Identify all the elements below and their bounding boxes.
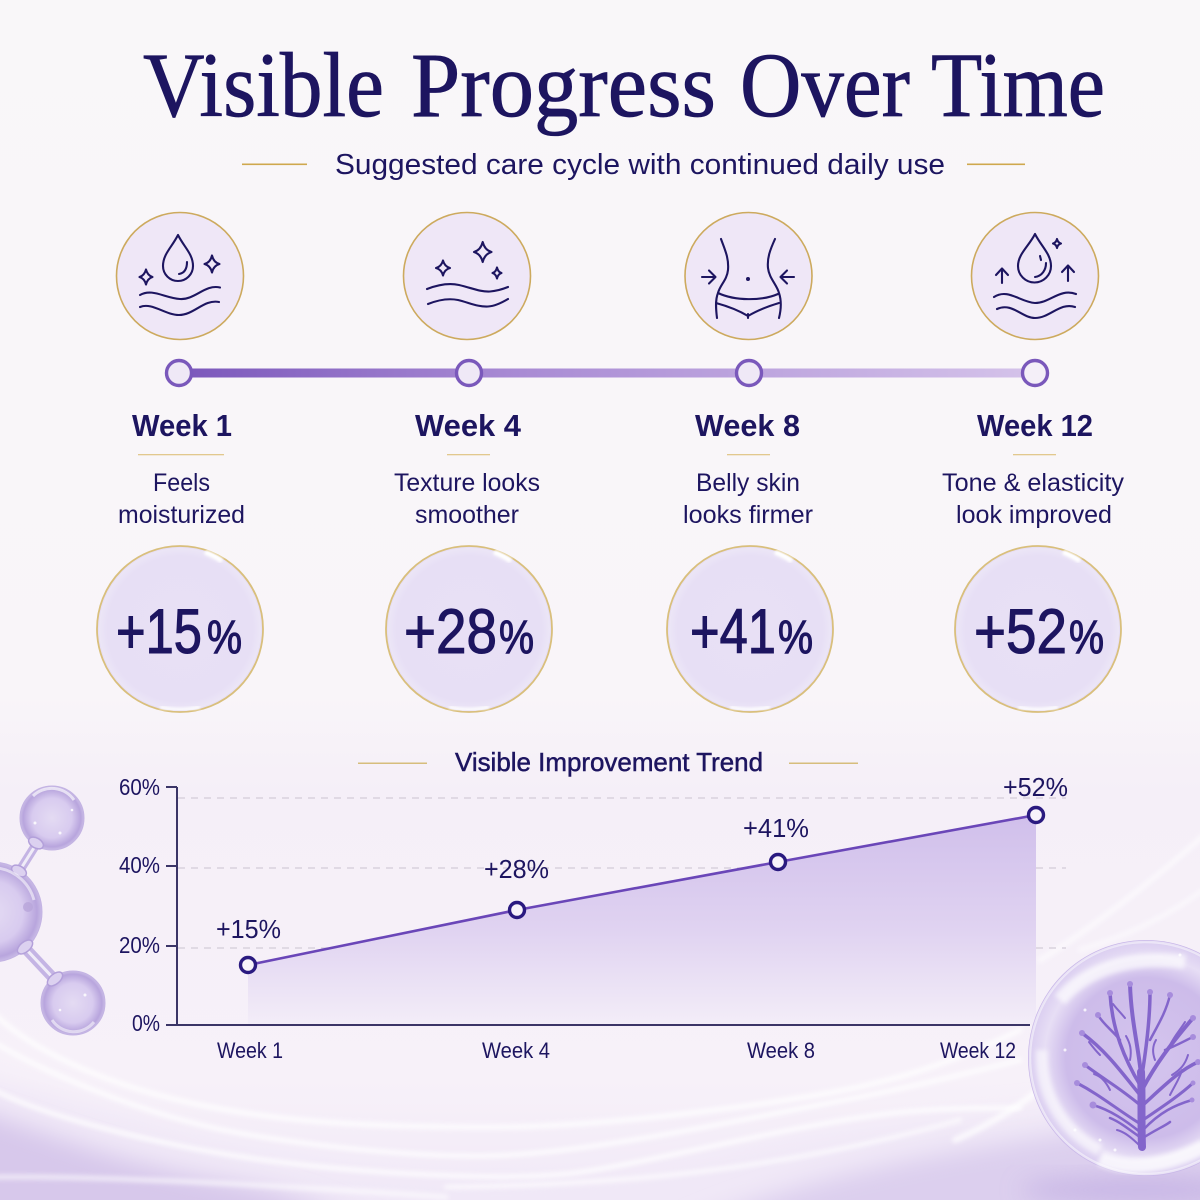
title: Time: [931, 34, 1105, 136]
step: week 4: smoother: [415, 501, 519, 529]
molecule illustration: [0, 786, 105, 1035]
glass sphere with lavender tree: [1020, 940, 1200, 1200]
stat badge: +15%: %: [207, 610, 242, 663]
step: week 4: Week 4: [415, 408, 522, 443]
step: week 12: Tone & elasticity: [942, 469, 1125, 497]
line chart: visible improvement trend: 0%: [132, 1010, 160, 1036]
title: [143, 34, 1105, 136]
icon: week 12 drop with arrows: [972, 212, 1098, 340]
stat badge: +52%: [955, 546, 1121, 712]
stat badge: +28%: +28: [404, 597, 497, 667]
title: Progress: [411, 34, 716, 136]
step: week 12: look improved: [956, 501, 1112, 529]
step: week 4: Texture looks: [394, 469, 540, 497]
icon: week 1 moisture drop: [116, 212, 244, 340]
line chart: visible improvement trend: +15%: [216, 914, 281, 944]
stat badge: +41%: %: [778, 610, 813, 663]
step: week 1: moisturized: [118, 501, 245, 529]
step: week 12: Week 12: [977, 408, 1093, 443]
step: week 1: Feels: [153, 469, 210, 497]
stat badge: +15%: [97, 546, 263, 712]
line chart: visible improvement trend: 20%: [119, 932, 160, 958]
line chart: visible improvement trend: Week 8: [747, 1038, 815, 1063]
line chart: visible improvement trend: Week 4: [482, 1038, 550, 1063]
title: Visible: [143, 34, 384, 136]
stat badge: +52%: +52: [974, 597, 1067, 667]
stat badge: +28%: %: [499, 610, 534, 663]
line chart: visible improvement trend: Week 12: [940, 1038, 1016, 1063]
line chart: visible improvement trend: +41%: [743, 813, 809, 843]
subtitle with gold rules: Suggested care cycle with continued daily use: [335, 149, 945, 181]
step: week 8: Week 8: [695, 408, 800, 443]
line chart: visible improvement trend: +52%: [1003, 772, 1068, 802]
icon: week 8 firmer belly: [685, 212, 812, 340]
step: week 8: looks firmer: [683, 501, 813, 529]
background with silk waves: [0, 1078, 1200, 1200]
chart heading: Visible Improvement Trend: [455, 747, 763, 777]
title: Over: [740, 34, 910, 136]
stat badge: +41%: +41: [690, 597, 776, 667]
step: week 8: [683, 408, 813, 529]
stat badge: +28%: [386, 546, 552, 712]
step: week 12: [942, 408, 1125, 529]
timeline: [166, 360, 1048, 386]
step: week 8: Belly skin: [696, 469, 800, 497]
line chart: visible improvement trend: [119, 772, 1068, 1063]
line chart: visible improvement trend: +28%: [484, 854, 549, 884]
step: week 4: [394, 408, 540, 529]
stat badge: +41%: [667, 546, 833, 712]
stat badge: +15%: +15: [116, 597, 202, 667]
step: week 1: [118, 408, 245, 529]
line chart: visible improvement trend: Week 1: [217, 1038, 283, 1063]
step: week 1: Week 1: [132, 408, 232, 443]
icon: week 4 smooth texture: [404, 212, 530, 340]
line chart: visible improvement trend: 40%: [119, 852, 160, 878]
line chart: visible improvement trend: 60%: [119, 774, 160, 800]
stat badge: +52%: %: [1069, 610, 1104, 663]
